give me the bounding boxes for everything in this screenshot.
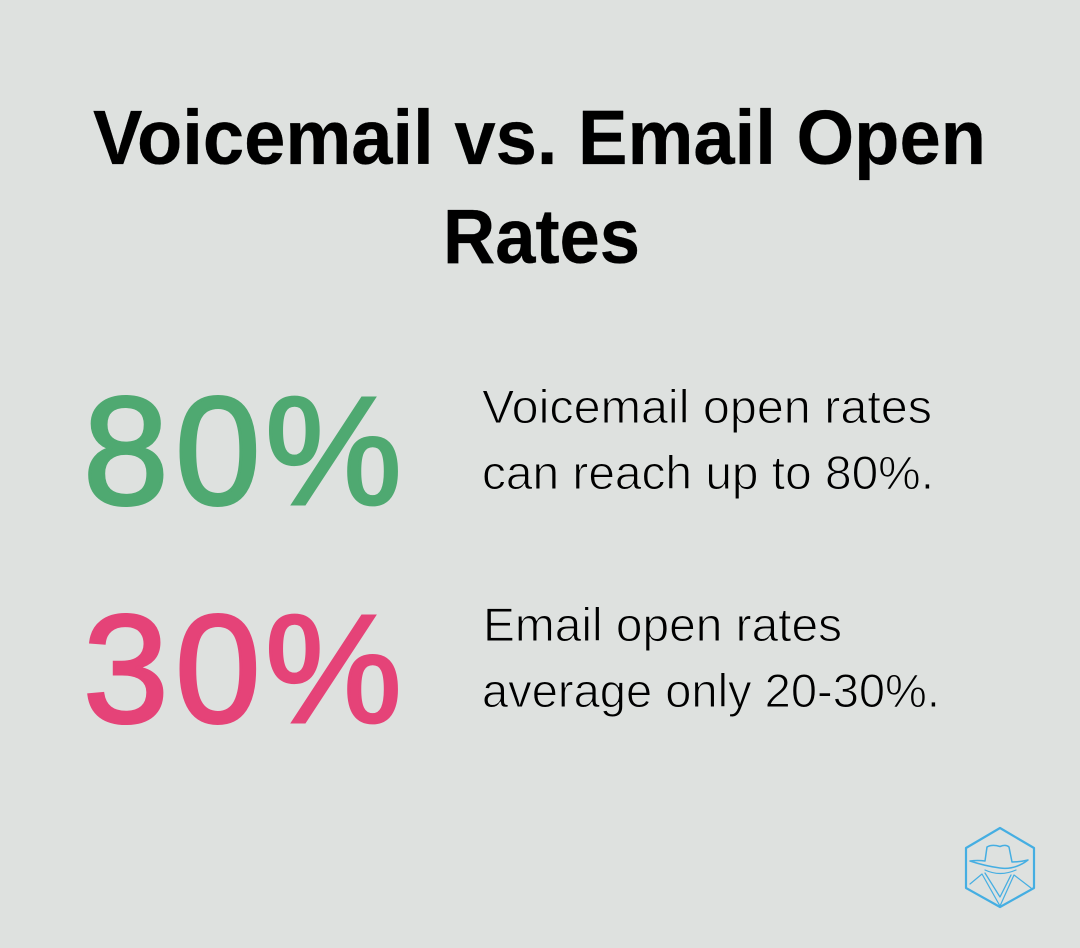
text: voicemail description: can reach up to 80%.	[482, 446, 934, 499]
icon: hexagon logo with hat figure	[966, 828, 1034, 907]
text: voicemail description	[482, 380, 934, 499]
title	[93, 95, 986, 280]
title: Rates	[443, 194, 640, 280]
stat: email 30%: 30%	[83, 583, 402, 755]
stat: voicemail 80%: 80%	[83, 365, 402, 537]
text: email description: average only 20-30%.	[482, 664, 940, 717]
text: email description	[482, 598, 940, 717]
text: voicemail description: Voicemail open rates	[482, 380, 932, 433]
text: email description: Email open rates	[483, 598, 842, 651]
title: Voicemail vs. Email Open	[93, 95, 986, 181]
